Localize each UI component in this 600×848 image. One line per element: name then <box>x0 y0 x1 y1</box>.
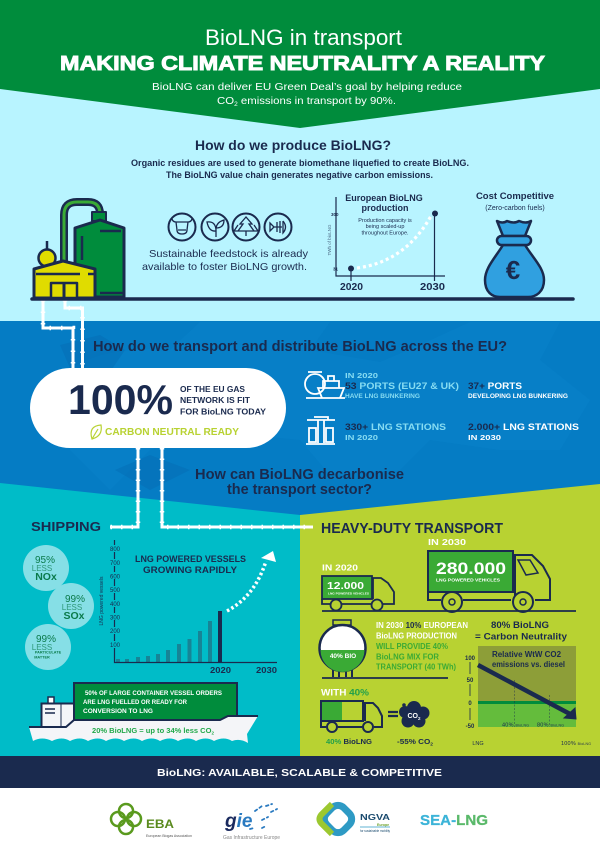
bubble: particulate matter: 99% <box>36 634 56 645</box>
bubble: NOx: LESS <box>32 564 52 573</box>
cost competitive heading <box>476 191 554 212</box>
logo: GIE: gie <box>224 811 253 832</box>
intro text <box>152 81 462 108</box>
LNG tank <box>320 620 448 678</box>
stations stats: 330+ LNG STATIONS <box>345 422 446 433</box>
truck 2020: 12.000 <box>327 581 365 592</box>
ports stats: HAVE LNG BUNKERING <box>345 394 420 400</box>
vessels bar chart: LNG powered vessels <box>99 576 105 625</box>
logo: NGVA: NGVA <box>360 813 390 822</box>
2030 production text: IN 2030 10% EUROPEAN <box>376 621 468 630</box>
production chart <box>327 193 445 293</box>
carbon neutrality heading: 80% BioLNG <box>491 620 549 631</box>
2030 production text: TRANSPORT (40 TWh) <box>376 662 456 672</box>
vessels bar chart <box>99 540 278 675</box>
bubble: particulate matter: LESS <box>32 643 52 652</box>
truck 2020: IN 2020 <box>322 562 358 572</box>
intro text: CO <box>217 95 233 107</box>
bubble: particulate matter: MATTER <box>34 656 50 660</box>
ship order text <box>83 690 222 715</box>
stations stats: IN 2020 <box>345 433 378 442</box>
icon: LNG station <box>306 417 335 444</box>
2030 production text: BioLNG MIX FOR <box>376 652 439 662</box>
logo: GIE <box>223 804 280 841</box>
truck 2030: 280.000 <box>436 559 506 578</box>
logo: NGVA <box>320 802 390 836</box>
chart title: LNG POWERED VESSELS <box>135 554 246 565</box>
WtW emissions chart: Relative WtW CO2 <box>492 650 562 659</box>
bubble: particulate matter <box>25 624 71 670</box>
stations stats: 2.000+ LNG STATIONS <box>468 422 579 433</box>
logo: GIE: Gas Infrastructure Europe <box>223 835 280 841</box>
chart title: production <box>362 203 408 213</box>
ports stats: 53 PORTS (EU27 & UK) <box>345 381 459 392</box>
network text: NETWORK IS FIT <box>180 396 250 405</box>
truck with 40% <box>321 688 382 746</box>
feedstock icons <box>168 214 292 240</box>
ground line <box>32 297 573 301</box>
footer band <box>0 756 600 788</box>
chart note: Production capacity is <box>358 218 412 224</box>
ship order text: 50% OF LARGE CONTAINER VESSEL ORDERS <box>85 690 222 697</box>
network text: OF THE EU GAS <box>180 385 246 394</box>
transport heading: How do we transport and distribute BioLNG across the EU? <box>93 339 507 355</box>
vessels bar chart: 300 <box>110 616 121 622</box>
production chart: 2020 <box>340 282 363 293</box>
ship order text: ARE LNG FUELLED OR READY FOR <box>83 699 187 706</box>
footer band: BioLNG: AVAILABLE, SCALABLE & COMPETITIVE <box>157 767 442 779</box>
emission bubbles <box>23 545 94 670</box>
WtW emissions chart: LNG <box>472 741 484 747</box>
ports stats: 37+ PORTS <box>468 381 522 392</box>
vessels bar chart: 100 <box>110 643 121 649</box>
cost competitive heading: Cost Competitive <box>476 191 554 202</box>
100% figure: 100% <box>68 376 173 423</box>
icon: cow <box>168 214 196 240</box>
carbon neutrality heading: = Carbon Neutrality <box>475 632 568 642</box>
intro text: emissions in transport by 90%. <box>238 95 396 107</box>
chart title <box>135 554 246 576</box>
production description: The BioLNG value chain generates negative carbon emissions. <box>166 170 433 181</box>
truck with 40%: 40% BioLNG <box>326 737 372 746</box>
production description <box>131 158 469 181</box>
truck 2030: LNG POWERED VEHICLES <box>436 578 500 582</box>
carbon neutral label: CARBON NEUTRAL READY <box>105 427 239 438</box>
WtW emissions chart <box>465 646 591 747</box>
icon: money bag <box>485 221 544 297</box>
WtW emissions chart: 40% BioLNG <box>502 722 529 728</box>
shipping heading: SHIPPING <box>31 519 101 534</box>
chart title: GROWING RAPIDLY <box>143 565 238 576</box>
vessels bar chart: 500 <box>110 588 121 594</box>
production chart: 300 <box>331 212 339 217</box>
vessels bar chart: 2030 <box>256 666 278 675</box>
production heading: How do we produce BioLNG? <box>195 137 391 153</box>
icon: fish bones <box>264 214 292 240</box>
decarbonise heading <box>195 467 404 498</box>
production chart: 31 <box>333 266 339 272</box>
bubble: SOx: 99% <box>65 594 85 605</box>
network text: FOR BioLNG TODAY <box>180 408 267 416</box>
vessels bar chart: 400 <box>110 602 121 608</box>
logo: NGVA: for sustainable mobility <box>360 829 390 833</box>
WtW emissions chart: 100 <box>465 656 476 662</box>
chart note <box>358 218 412 236</box>
ship order text: CONVERSION TO LNG <box>83 708 153 715</box>
truck 2020: LNG POWERED VEHICLES <box>328 592 369 596</box>
hull caption: 20% BioLNG = up to 34% less CO <box>92 726 211 735</box>
logo: NGVA: Europe <box>377 823 389 827</box>
decarbonise heading: How can BioLNG decarbonise <box>195 467 404 483</box>
truck with 40%: WITH 40% <box>321 688 369 698</box>
truck 2030: IN 2030 <box>428 537 466 547</box>
chart title <box>345 193 423 213</box>
gas network pill <box>30 368 286 448</box>
CO2 reduction: 2 <box>430 742 434 746</box>
truck 2020 <box>322 562 394 610</box>
WtW emissions chart: emissions vs. diesel <box>492 660 565 669</box>
logo: EBA: European Biogas Association <box>146 833 192 838</box>
feedstock text <box>142 248 309 273</box>
icon: biogas plant <box>34 202 124 298</box>
WtW emissions chart: 0 <box>468 701 472 707</box>
ports stats: DEVELOPING LNG BUNKERING <box>468 394 568 400</box>
carbon neutrality heading <box>475 620 568 642</box>
bubble: NOx <box>23 545 69 591</box>
heavy-duty heading: HEAVY-DUTY TRANSPORT <box>321 520 503 537</box>
production chart: 2030 <box>420 282 445 293</box>
bubble: NOx: NOx <box>35 571 57 583</box>
bubble: SOx: SOx <box>63 610 85 622</box>
logo: EBA: EBA <box>146 817 174 831</box>
LNG tank: 40% BIO <box>330 653 356 660</box>
vessels bar chart: 200 <box>110 629 121 635</box>
chart title: European BioLNG <box>345 193 423 203</box>
decarbonise heading: the transport sector? <box>227 482 372 498</box>
vessels bar chart: 800 <box>110 547 121 553</box>
icon: CO2 cloud <box>399 701 430 728</box>
intro text: BioLNG can deliver EU Green Deal’s goal by helping reduce <box>152 81 462 93</box>
chart note: being scaled-up <box>366 224 404 230</box>
stations stats <box>345 422 579 442</box>
icon: CO2 cloud: CO <box>407 713 418 720</box>
vessels bar chart: 700 <box>110 561 121 567</box>
bubble: particulate matter: PARTICULATE <box>35 650 62 654</box>
icon: leaf plant <box>202 214 228 240</box>
2030 production text: BioLNG PRODUCTION <box>376 632 457 640</box>
icon: LNG ship and tank <box>305 372 345 398</box>
chart note: throughout Europe. <box>361 230 409 236</box>
WtW emissions chart: 50 <box>467 678 474 684</box>
header banner <box>0 0 600 128</box>
WtW emissions chart: -50 <box>466 724 475 730</box>
2030 production text: WILL PROVIDE 40% <box>376 642 448 651</box>
icon: leaf <box>91 425 101 439</box>
hull caption: 2 <box>211 730 214 736</box>
logo: EBA <box>111 804 192 838</box>
intro text: 2 <box>234 102 238 108</box>
pipelines from plant <box>43 300 82 368</box>
container ship <box>29 683 258 743</box>
ports stats: IN 2020 <box>345 371 378 380</box>
cost competitive heading: (Zero-carbon fuels) <box>485 205 545 212</box>
ports stats <box>345 371 568 400</box>
arrow: growth <box>227 551 276 611</box>
CO2 reduction: -55% CO <box>397 737 428 746</box>
icon: money bag: € <box>506 255 520 285</box>
production description: Organic residues are used to generate biomethane liquefied to create BioLNG. <box>131 158 469 169</box>
vessels bar chart: 2020 <box>210 666 232 675</box>
pipelines to sectors <box>110 448 313 527</box>
icon: trees <box>232 214 260 240</box>
logo: SEA-LNG: SEA-LNG <box>420 812 488 829</box>
production chart: TWh of bioLNG <box>327 224 332 256</box>
WtW emissions chart: 80% BioLNG <box>537 722 564 728</box>
WtW emissions chart: 100% BioLNG <box>561 741 591 747</box>
stations stats: IN 2030 <box>468 433 501 442</box>
title: BioLNG in transport <box>205 25 402 50</box>
bubble: SOx <box>48 583 94 629</box>
vessels bar chart: 600 <box>110 574 121 580</box>
bubble: SOx: LESS <box>62 603 82 612</box>
subtitle: MAKING CLIMATE NEUTRALITY A REALITY <box>60 53 546 75</box>
icon: CO2 cloud: 2 <box>418 716 421 721</box>
network text <box>180 385 267 416</box>
feedstock text: Sustainable feedstock is already <box>149 248 309 260</box>
2030 production text <box>376 621 468 672</box>
truck 2030 <box>428 537 550 612</box>
bubble: NOx: 95% <box>35 555 55 566</box>
feedstock text: available to foster BioLNG growth. <box>142 261 307 273</box>
equals sign <box>388 712 398 716</box>
